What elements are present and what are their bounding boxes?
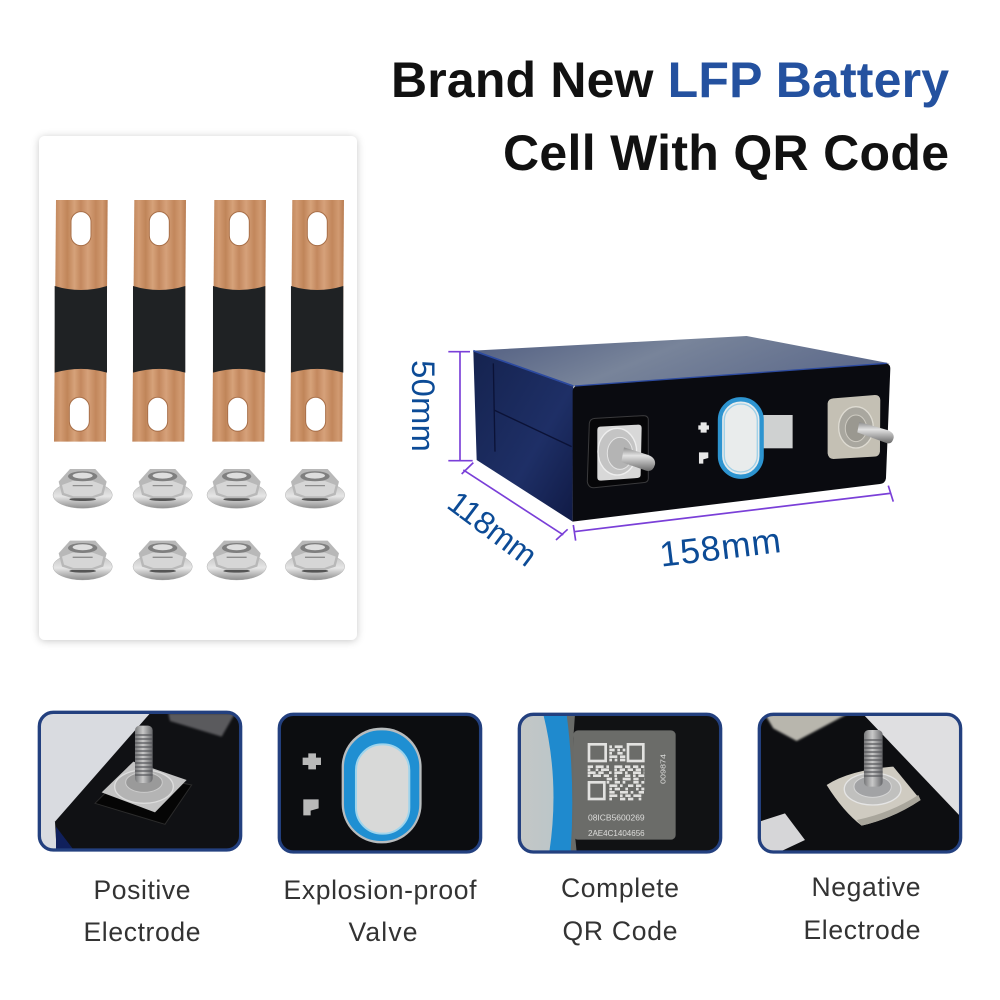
caption: explosion-proof valve (284, 875, 477, 947)
caption: explosion-proof valve: Valve (348, 917, 418, 947)
icon: QR tag (763, 415, 793, 448)
thumbnail: explosion-proof valve (279, 714, 481, 852)
icon: explosion-proof valve (720, 399, 762, 477)
thumbnail: QR code (519, 714, 721, 852)
thumbnail: QR code: 08ICB5600269 (588, 812, 645, 822)
QR code pattern (588, 744, 644, 799)
caption: positive electrode (84, 875, 200, 947)
icon: P mark (699, 452, 708, 464)
battery cell with dimensions (405, 336, 894, 575)
caption: complete QR code: QR Code (562, 916, 678, 946)
thumbnail: positive electrode (39, 712, 243, 852)
caption: complete QR code (561, 873, 679, 946)
battery body (473, 336, 890, 522)
thumbnail: QR code: 009874 (658, 753, 667, 784)
thumbnail: QR code: 2AE4C1404656 (588, 828, 645, 838)
panel: accessories (39, 136, 357, 640)
title: Cell With QR Code (503, 125, 949, 181)
dimension lines (448, 352, 893, 541)
icon: left terminal (587, 416, 655, 488)
dimension: 50mm: 50mm (405, 360, 442, 452)
flange nuts (53, 469, 345, 580)
dimension: 118mm: 118mm (441, 484, 544, 573)
title: Brand New LFP Battery (391, 52, 949, 108)
copper busbar straps (54, 200, 344, 442)
icon: plus mark (698, 422, 709, 433)
caption: negative electrode: Electrode (804, 915, 920, 945)
caption: positive electrode: Electrode (84, 917, 200, 947)
thumbnail: negative electrode (759, 714, 961, 853)
title (391, 52, 949, 181)
dimension: 158mm: 158mm (657, 521, 783, 575)
icon: right terminal (828, 395, 894, 459)
caption: complete QR code: Complete (561, 873, 679, 903)
caption: negative electrode: Negative (812, 872, 920, 902)
caption: negative electrode (804, 872, 920, 945)
caption: explosion-proof valve: Explosion-proof (284, 875, 477, 905)
caption: positive electrode: Positive (94, 875, 190, 905)
